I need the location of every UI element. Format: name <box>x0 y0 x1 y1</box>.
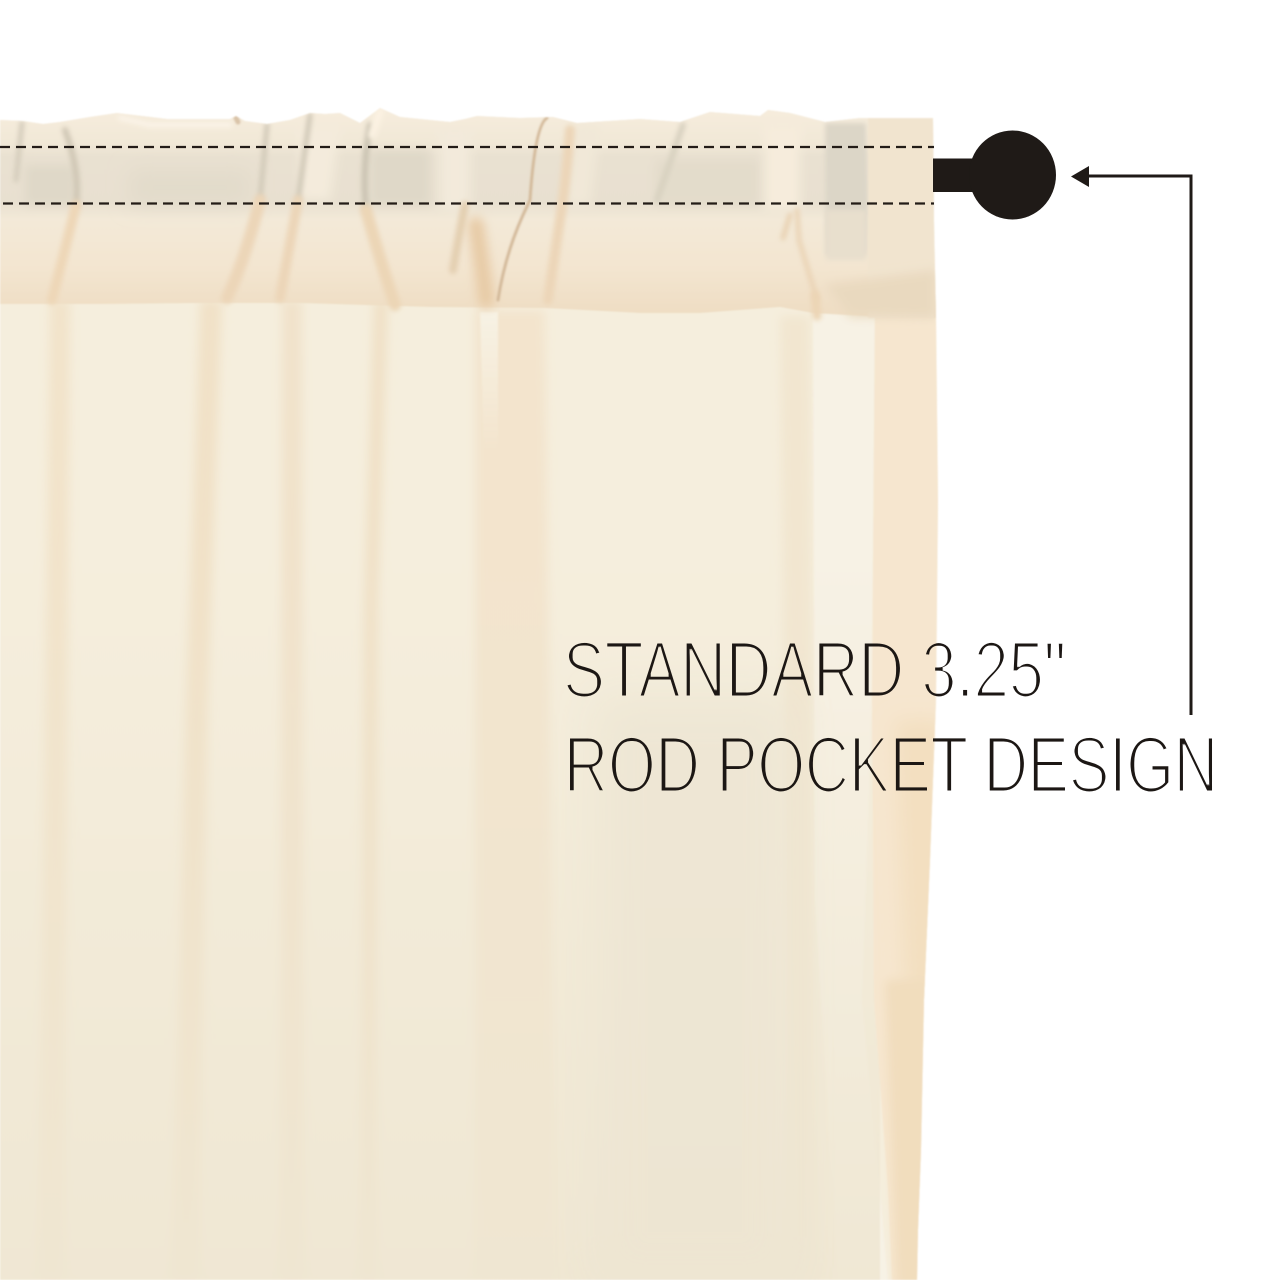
arrow: callout pointing to rod <box>1071 166 1191 715</box>
lower body shading <box>1 878 880 1280</box>
header band shading <box>25 118 936 318</box>
callout text: rod pocket size <box>563 625 1218 809</box>
callout text: rod pocket size: STANDARD 3.25" <box>563 625 1066 714</box>
pocket bottom stitching dashed line <box>3 202 934 205</box>
icon: curtain rod with round finial <box>933 130 1056 220</box>
vertical fabric folds <box>38 300 888 1280</box>
rod pocket header band <box>0 148 868 316</box>
right side hem <box>872 319 938 1279</box>
panel: curtain <box>0 100 960 1280</box>
header fold lines <box>16 112 817 316</box>
pocket top stitching dashed line <box>0 146 934 148</box>
